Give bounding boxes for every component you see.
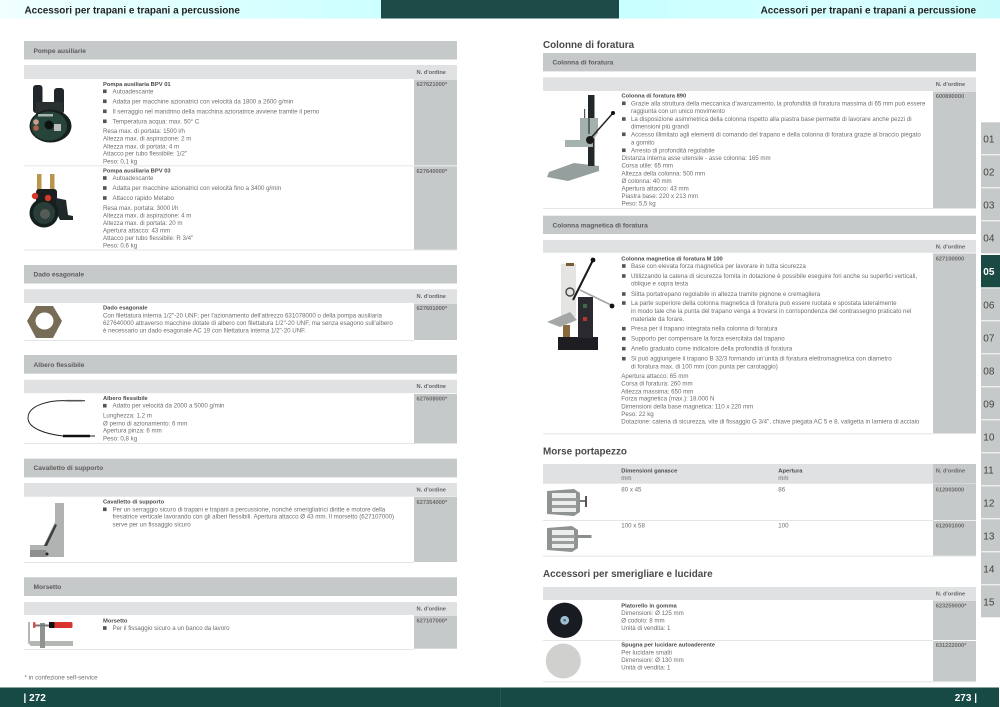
text block: Platorello in gomma	[621, 603, 684, 632]
text block: Colonna di foratura 890: Peso: 5,5 kg	[622, 201, 656, 208]
text block: Colonna magnetica M 100: materiale da forare.	[631, 316, 685, 323]
chapter tabs: 04	[983, 233, 995, 244]
chapter tabs: 13	[983, 531, 995, 542]
order column	[414, 80, 457, 250]
text block: Dado esagonale	[103, 306, 393, 335]
icon: vise 1	[547, 489, 587, 516]
text block: BPV 03: Attacco rapido Metabo	[112, 195, 175, 202]
section heading	[24, 41, 457, 60]
text block: BPV 03: Autoadescante	[112, 175, 154, 182]
section heading	[24, 577, 457, 596]
text block: BPV 01: Il serraggio nel mandrino della macchina azionatrice avviene tramite il perno	[112, 108, 320, 115]
footer band	[0, 688, 1000, 707]
text block: Colonna magnetica M 100: Dimensioni della base magnetica: 110 x 220 mm	[621, 403, 753, 410]
chapter tabs	[981, 122, 1000, 617]
icon: rubber backing pad	[547, 603, 582, 638]
panel: Albero flessibile	[24, 355, 457, 444]
text block: Cavalletto di supporto: fresatrice verticale lavorando con gli alberi flessibili. Apertura attacco Ø 43 mm. Il morsetto (627107000)	[112, 514, 394, 521]
icon: pump BPV 03	[30, 174, 73, 228]
panel: Morse portapezzo table	[543, 464, 976, 557]
icon: clamp	[28, 622, 73, 648]
table header: N. d'ordine	[416, 384, 446, 390]
text block: BPV 01: Temperatura acqua: max. 50° C	[112, 118, 200, 125]
text row 2: 100	[778, 522, 789, 529]
text row 1: 86	[778, 487, 786, 494]
section heading	[24, 265, 457, 284]
chapter tabs: 03	[983, 200, 995, 211]
text block: Colonna di foratura 890: Grazie alla struttura della meccanica d'avanzamento, la profondità di foratura massima di 65 mm può essere	[631, 100, 926, 107]
text block: Colonna magnetica M 100: Peso: 22 kg	[621, 411, 654, 418]
icon: vise 2	[547, 526, 592, 552]
text block: Dado esagonale: è necessario un dado esagonale AC 19 con filettatura interna 1/2"-20 UNF.	[103, 328, 306, 335]
text block: Albero flessibile	[103, 396, 225, 442]
heading: Colonne di foratura: Colonne di foratura	[543, 40, 635, 51]
chapter tabs: 01	[983, 134, 995, 145]
text block: Dado esagonale: Dado esagonale	[103, 306, 148, 312]
text block: Colonna magnetica M 100: Corsa di foratura: 260 mm	[621, 381, 693, 388]
text block: Colonna magnetica M 100: Supporto per compensare la forza esercitata dal trapano	[631, 336, 785, 343]
order column: 612003000	[936, 488, 964, 494]
text block: Albero flessibile: Lunghezza: 1,2 m	[103, 413, 152, 420]
text block: Spugna per lucidare: Unità di vendita: 1	[621, 664, 671, 671]
order column: 627601000*	[416, 306, 448, 312]
text block: BPV 01: Autoadescante	[112, 88, 154, 95]
text block: Colonna di foratura 890: La disposizione asimmetrica della colonna rispetto alla piastra base permette di lavorare anche pezzi di	[631, 116, 912, 123]
text block: Colonna magnetica M 100: Base con elevata forza magnetica per lavorare in tutta sicurezza	[631, 263, 806, 270]
order column	[414, 304, 457, 340]
table header	[24, 483, 457, 497]
text block: Albero flessibile: Adatto per velocità da 2000 a 5000 g/min	[112, 403, 225, 410]
order column	[414, 497, 457, 562]
section heading	[543, 53, 976, 71]
text block: Colonna di foratura 890: Corsa utile: 65 mm	[622, 163, 673, 170]
text block: BPV 03	[103, 169, 282, 250]
text row 1: 80 x 45	[621, 487, 642, 494]
text block: Colonna di foratura 890: Ø colonna: 40 mm	[622, 178, 672, 185]
text block: Spugna per lucidare: Dimensioni: Ø 130 mm	[621, 657, 684, 664]
icon: hex nut	[27, 306, 62, 338]
table header: N. d'ordine	[416, 70, 446, 76]
text block: Colonna magnetica M 100: Apertura attacco: 65 mm	[621, 373, 689, 380]
text block: Platorello in gomma: Dimensioni: Ø 125 mm	[621, 610, 684, 617]
page number 272: | 272	[24, 693, 46, 704]
text block: Albero flessibile: Peso: 0,8 kg	[103, 435, 138, 442]
table header	[24, 289, 457, 303]
text block: Colonna di foratura 890: Piastra base: 220 x 213 mm	[622, 193, 698, 200]
order column: 612001000	[936, 523, 964, 529]
table header	[543, 240, 976, 253]
table header	[543, 464, 976, 484]
text block: BPV 03: Apertura attacco: 43 mm	[103, 228, 170, 235]
text block: Colonna magnetica M 100: Altezza massima: 650 mm	[621, 388, 693, 395]
text block: Colonna di foratura 890: a gomito	[631, 139, 655, 146]
text block: Colonna di foratura 890: Accesso illimitato agli elementi di comando del trapano e della colonna di foratura grazie al braccio piegato	[631, 131, 921, 138]
icon: magnetic drill stand	[547, 258, 614, 350]
panel: Colonna magnetica di foratura	[543, 216, 976, 434]
text block: Colonna di foratura 890: Distanza interna asse utensile - asse colonna: 165 mm	[622, 155, 771, 162]
text block: Colonna magnetica M 100: oblique e sopra testa	[631, 281, 689, 288]
panel: Cavalletto di supporto	[24, 459, 457, 563]
order column: 627107000*	[416, 618, 448, 624]
order column	[933, 484, 976, 556]
text block: Colonna di foratura 890: raggiunta con un unico movimento	[631, 108, 725, 115]
order column	[414, 394, 457, 443]
table header: N. d'ordine	[416, 294, 446, 300]
text block: Colonna magnetica M 100: Dotazione: catena di sicurezza, vite di fissaggio G 3/4", chiave piegata AC 5 e 8, valigetta in lamiera di acciaio	[621, 419, 920, 426]
text block: BPV 01: Attacco per tubo flessibile: 1/2"	[103, 151, 187, 158]
text block: BPV 01: Resa max. di portata: 1500 l/h	[103, 128, 186, 135]
chapter tabs: 08	[983, 366, 995, 377]
text block: Colonna magnetica M 100: Presa per il trapano integrata nella colonna di foratura	[631, 326, 778, 333]
text block: Colonna magnetica M 100: in modo tale che la punta del trapano venga a trovarsi in corrispondenza del contrassegno praticato nel	[631, 308, 911, 315]
text block: BPV 03: Altezza max. di portata: 20 m	[103, 220, 183, 227]
page number 273: 273 |	[955, 693, 977, 704]
text block: BPV 03: Peso: 0,6 kg	[103, 243, 138, 250]
table header	[543, 77, 976, 91]
text block: Colonna magnetica M 100: Forza magnetica (max.): 18.000 N	[621, 396, 714, 403]
table header: N. d'ordine	[416, 606, 446, 612]
order column	[933, 92, 976, 208]
panel: Dado esagonale	[24, 265, 457, 341]
order column: 623259000*	[936, 603, 967, 609]
table header: N. d'ordine	[936, 82, 965, 88]
section heading: Albero flessibile	[34, 362, 85, 369]
text block: Cavalletto di supporto: Per un serraggio sicuro di trapani e trapani a percussione, nonché smerigliatrici diritte e motore della	[112, 506, 386, 513]
panel: Pompe ausiliarie	[24, 41, 457, 250]
chapter tabs: 11	[983, 465, 994, 476]
text block: Platorello in gomma: Unità di vendita: 1	[621, 625, 671, 632]
text block: Dado esagonale: 627640000 attraverso macchine dotate di albero con filettatura 1/2"-20 UNF, ma senza esagono sull'albero	[103, 320, 393, 327]
table header: mm	[778, 475, 789, 482]
order column: 627608000*	[416, 396, 448, 402]
order column	[414, 616, 457, 649]
icon: drill stand	[547, 95, 615, 181]
section heading	[24, 459, 457, 477]
table header: Apertura	[778, 468, 803, 474]
text block: Colonna di foratura 890: Arresto di profondità regolabile	[631, 147, 715, 154]
icon: pump BPV 01	[30, 85, 72, 142]
chapter tabs: 12	[983, 498, 995, 509]
text block: BPV 03: Altezza max. di aspirazione: 4 m	[103, 212, 191, 219]
text block: Albero flessibile: Ø perno di azionamento: 6 mm	[103, 420, 187, 427]
text block: Colonna magnetica M 100: Utilizzando la catena di sicurezza fornita in dotazione è possibile eseguire fori anche su superfici verticali,	[631, 273, 917, 280]
chapter tabs: 15	[983, 597, 995, 608]
text block: Morsetto: Morsetto	[103, 618, 128, 624]
text block: BPV 01: Peso: 0,1 kg	[103, 159, 138, 166]
text block: Spugna per lucidare: Per lucidare smalti	[621, 649, 672, 656]
text block: Colonna di foratura 890: Colonna di foratura 890	[622, 94, 686, 100]
table header: Dimensioni ganasce	[621, 468, 678, 474]
chapter tabs: 02	[983, 167, 995, 178]
text block: Colonna magnetica M 100: di foratura max. di 100 mm (con punta per carotaggio)	[631, 363, 778, 370]
text block: Cavalletto di supporto: serve per un fissaggio sicuro	[112, 521, 191, 528]
table header	[24, 65, 457, 79]
chapter tabs: 06	[983, 300, 995, 311]
chapter tabs: 10	[983, 432, 995, 443]
section heading	[543, 216, 976, 234]
panel: Colonna di foratura	[543, 53, 976, 209]
text block: Colonna di foratura 890	[622, 94, 926, 208]
order column	[933, 254, 976, 434]
table header: N. d'ordine	[936, 591, 965, 597]
text block: BPV 03: Attacco per tubo flessibile: R 3/4"	[103, 235, 193, 242]
order column	[933, 600, 976, 681]
text block: Spugna per lucidare: Spugna per lucidare autoaderente	[621, 643, 716, 649]
section heading: Dado esagonale	[34, 272, 84, 278]
text block: Colonna di foratura 890: Apertura attacco: 43 mm	[622, 185, 689, 192]
text block: Colonna di foratura 890: Altezza della colonna: 500 mm	[622, 170, 705, 177]
table header	[24, 380, 457, 393]
text row 2	[621, 522, 789, 529]
text block: Platorello in gomma: Ø codolo: 8 mm	[621, 617, 665, 624]
text block: Colonna magnetica M 100	[621, 257, 920, 426]
text block: BPV 01: Adatta per macchine azionatrici con velocità da 1800 a 2600 g/min	[112, 98, 294, 105]
text block: Dado esagonale: Con filettatura interna 1/2"-20 UNF; per l'azionamento dell'attrezzo 631078000 o della pompa ausiliaria	[103, 313, 383, 320]
panel: Morsetto	[24, 577, 457, 650]
text block: Colonna di foratura 890: dimensioni più grandi	[631, 124, 689, 131]
section heading: Colonna magnetica di foratura	[552, 222, 648, 230]
text block: BPV 03: Resa max. portata: 3000 l/h	[103, 205, 179, 212]
section heading	[24, 355, 457, 374]
top banner	[0, 0, 1000, 18]
icon: polishing sponge	[546, 644, 581, 678]
text block: Colonna magnetica M 100: Slitta portatrepano regolabile in altezza tramite pignone e cremagliera	[631, 291, 821, 298]
order column: 627100000	[936, 256, 964, 262]
table header	[24, 602, 457, 615]
order column: 600890000	[936, 94, 964, 100]
chapter tabs: 14	[983, 564, 995, 575]
text block: Platorello in gomma: Platorello in gomma	[621, 603, 677, 609]
table header: mm	[621, 475, 632, 482]
section heading: Morsetto	[34, 584, 61, 591]
panel: Accessori per smerigliare e lucidare table	[543, 587, 976, 682]
text block: Albero flessibile: Albero flessibile	[103, 396, 149, 402]
footnote: * in confezione self-service	[24, 675, 98, 682]
order column: 631222000*	[936, 643, 967, 649]
text block: BPV 03: Pompa ausiliaria BPV 03	[103, 169, 171, 175]
text block: Cavalletto di supporto	[103, 500, 394, 528]
table header: N. d'ordine	[416, 488, 446, 494]
order column: 627621000*	[416, 82, 448, 88]
order column: 627640000*	[416, 169, 448, 175]
text row 1	[621, 487, 786, 494]
text block: Colonna magnetica M 100: Si può aggiungere il trapano B 32/3 formando un'unità di foratura elettromagnetica con diametro	[631, 356, 892, 363]
text block: BPV 01: Pompa ausiliaria BPV 01	[103, 82, 171, 88]
text block: BPV 01	[103, 82, 320, 166]
title: left page: Accessori per trapani e trapani a percussione	[24, 5, 240, 16]
text row 2: 100 x 58	[621, 522, 645, 529]
chapter tabs: 05	[983, 267, 995, 278]
section heading: Pompe ausiliarie	[34, 48, 86, 55]
text block: Colonna magnetica M 100: Colonna magnetica di foratura M 100	[621, 257, 723, 263]
text block: Cavalletto di supporto: Cavalletto di supporto	[103, 500, 165, 506]
icon: flexible shaft	[28, 401, 95, 436]
section heading: Cavalletto di supporto	[34, 465, 103, 472]
text block: Albero flessibile: Apertura pinza: 6 mm	[103, 428, 162, 435]
heading: Accessori per smerigliare e lucidare: Accessori per smerigliare e lucidare	[543, 569, 713, 580]
section heading: Colonna di foratura	[552, 60, 614, 66]
table header	[543, 587, 976, 600]
text block: BPV 03: Adatta per macchine azionatrici con velocità fino a 3400 g/min	[112, 185, 282, 192]
icon: support stand	[30, 503, 64, 557]
text block: BPV 01: Altezza max. di portata: 4 m	[103, 143, 179, 150]
table header: N. d'ordine	[936, 244, 965, 250]
title: right page: Accessori per trapani e trapani a percussione	[761, 5, 976, 16]
text block: Spugna per lucidare	[621, 643, 716, 671]
order column: 627354000*	[416, 500, 448, 506]
table header: N. d'ordine	[936, 468, 965, 474]
text block: BPV 01: Altezza max. di aspirazione: 2 m	[103, 136, 191, 143]
text block: Morsetto	[103, 618, 230, 632]
text block: Morsetto: Per il fissaggio sicuro a un banco da lavoro	[112, 625, 230, 632]
heading: Morse portapezzo: Morse portapezzo	[543, 447, 627, 458]
text block: Colonna magnetica M 100: Anello graduato come indicatore della profondità di foratura	[631, 346, 793, 353]
chapter tabs: 09	[983, 399, 995, 410]
text block: Colonna magnetica M 100: La parte superiore della colonna magnetica di foratura può essere ruotata e spostata lateralmente	[631, 300, 897, 307]
chapter tabs: 07	[983, 333, 995, 344]
